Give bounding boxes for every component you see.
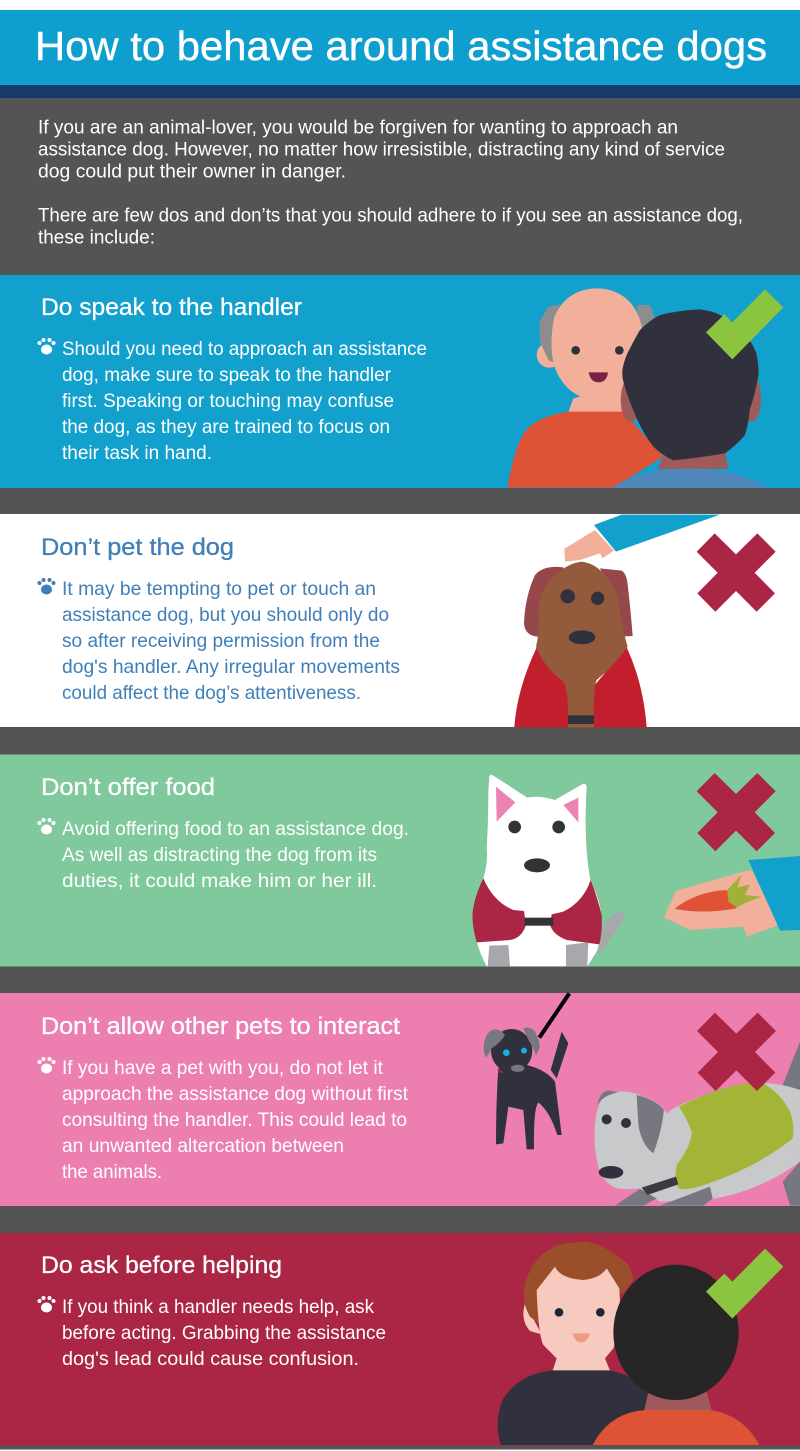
heading: Don’t offer food: [41, 774, 215, 801]
body text: Should you need to approach an assistance: [62, 338, 427, 360]
body text: assistance dog, but you should only do: [62, 604, 389, 626]
heading: Do ask before helping: [41, 1252, 282, 1279]
body text: [62, 1296, 386, 1370]
icon: paw: [38, 1296, 56, 1312]
title banner: [0, 10, 800, 98]
illustration: small black dog on lead: [484, 993, 569, 1149]
panel: don't offer food: [0, 754, 800, 966]
body text: It may be tempting to pet or touch an: [62, 578, 376, 600]
illustration: boy asking handler: [498, 1242, 759, 1445]
intro text: dog could put their owner in danger.: [38, 162, 346, 182]
panel: do ask before helping: [0, 1233, 800, 1446]
icon: cross: [697, 1013, 776, 1091]
body text: their task in hand.: [62, 442, 212, 464]
icon: paw: [38, 338, 56, 354]
illustration: hand petting brown dog: [514, 515, 720, 727]
panel: introduction: [0, 98, 800, 275]
icon: tick: [706, 289, 783, 359]
body text: before acting. Grabbing the assistance: [62, 1322, 386, 1344]
heading: Don’t pet the dog: [41, 534, 234, 561]
icon: cross: [697, 773, 776, 851]
intro text: these include:: [38, 228, 155, 248]
intro text: assistance dog. However, no matter how irresistible, distracting any kind of service: [38, 140, 725, 160]
body text: [62, 578, 400, 704]
heading: Do speak to the handler: [41, 294, 302, 321]
body text: duties, it could make him or her ill.: [62, 870, 377, 892]
body text: could affect the dog’s attentiveness.: [62, 682, 361, 704]
illustration: hand offering carrot: [664, 856, 800, 937]
body text: so after receiving permission from the: [62, 630, 380, 652]
divider bars: [0, 488, 800, 1450]
body text: [62, 818, 409, 892]
icon: cross: [697, 533, 776, 612]
panel: don't pet the dog: [0, 514, 800, 727]
heading: Don’t allow other pets to interact: [41, 1013, 400, 1040]
panel: do speak to the handler: [0, 275, 800, 488]
body text: As well as distracting the dog from its: [62, 844, 377, 866]
body text: approach the assistance dog without first: [62, 1083, 409, 1105]
body text: dog's handler. Any irregular movements: [62, 656, 400, 678]
illustration: man speaking to handler: [507, 288, 768, 488]
body text: the dog, as they are trained to focus on: [62, 416, 390, 438]
panel: don't allow other pets to interact: [0, 993, 800, 1206]
intro text: [38, 118, 743, 248]
body text: dog, make sure to speak to the handler: [62, 364, 391, 386]
body text: If you have a pet with you, do not let it: [62, 1057, 384, 1079]
icon: tick: [706, 1249, 783, 1319]
icon: paw: [38, 578, 56, 594]
body text: first. Speaking or touching may confuse: [62, 390, 394, 412]
intro text: If you are an animal-lover, you would be forgiven for wanting to approach an: [38, 118, 678, 138]
body text: If you think a handler needs help, ask: [62, 1296, 374, 1318]
body text: [62, 338, 427, 464]
body text: dog's lead could cause confusion.: [62, 1348, 359, 1370]
body text: consulting the handler. This could lead to: [62, 1109, 407, 1131]
illustration: white dog: [472, 775, 624, 966]
icon: paw: [38, 818, 56, 834]
icon: paw: [38, 1057, 56, 1074]
title: How to behave around assistance dogs: [35, 23, 767, 69]
intro text: There are few dos and don’ts that you should adhere to if you see an assistance dog,: [38, 206, 743, 226]
body text: the animals.: [62, 1161, 162, 1183]
body text: an unwanted altercation between: [62, 1135, 344, 1157]
body text: Avoid offering food to an assistance dog.: [62, 818, 409, 840]
illustration: grey assistance dog in green jacket: [594, 1042, 800, 1206]
body text: [62, 1057, 409, 1183]
